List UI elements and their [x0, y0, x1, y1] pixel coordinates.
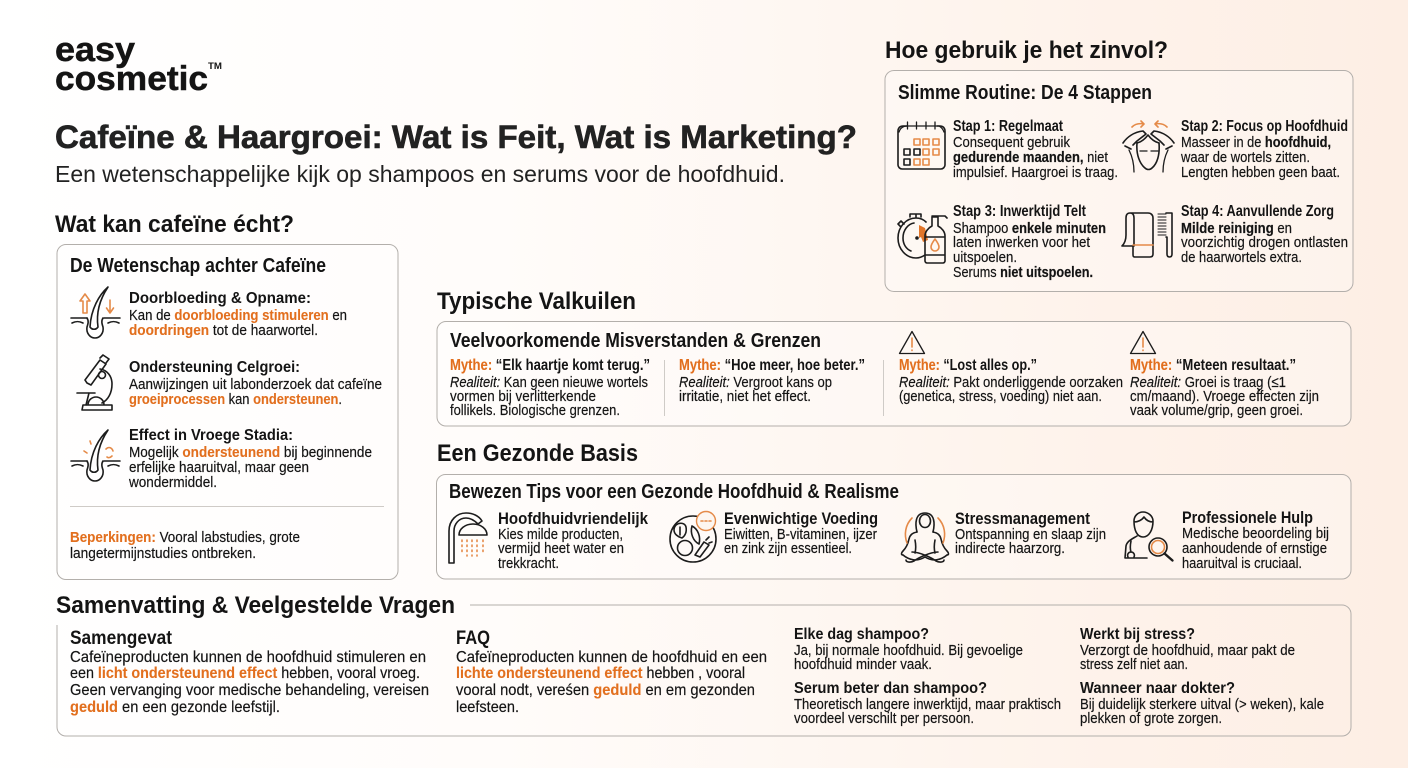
text: Effect in Vroege Stadia: Mogelijk ondersteunend bij beginnende: [129, 444, 372, 461]
text: Samengevat: Samengevat: [70, 628, 173, 649]
text: Doorbloeding & Opname: Kan de doorbloeding stimuleren en: [129, 307, 347, 324]
panel: Misverstanden & Grenzen: [437, 322, 1351, 426]
text: Effect in Vroege Stadia: [128, 427, 372, 491]
text: Stap 3: uitspoelen.: [953, 249, 1017, 266]
text: Beperkingen: Beperkingen: Vooral labstudies, grote: [70, 529, 300, 546]
myth 1: vormen bij verlitterkende: [450, 388, 596, 405]
text: Stap 3: Serums niet uitspoelen.: [953, 264, 1093, 281]
logo: easy cosmetic: TM: [208, 61, 222, 71]
text: Stap 4: Milde reiniging en: [1181, 220, 1292, 237]
text: Hoofdhuidvriendelijk: trekkracht.: [498, 555, 559, 572]
text: Stressmanagement: [955, 509, 1106, 557]
logo: easy cosmetic: cosmetic: [55, 60, 208, 98]
text: Stap 1: gedurende maanden, niet: [953, 149, 1109, 166]
FAQ: Serum beter dan shampoo: [794, 680, 1061, 727]
text: Effect in Vroege Stadia: erfelijke haaruitval, maar geen: [129, 459, 309, 476]
text: Hoofdhuidvriendelijk: [498, 509, 648, 572]
panel heading: Slimme Routine: De 4 Stappen: [898, 81, 1152, 104]
heading: Samenvatting & Veelgestelde Vragen: Samenvatting & Veelgestelde Vragen: [56, 592, 455, 619]
text: Beperkingen: [70, 529, 300, 562]
logo: easy cosmetic: easy: [55, 31, 135, 69]
text: Stressmanagement: Ontspanning en slaap zijn: [955, 526, 1106, 543]
panel heading: De Wetenschap achter Cafeïne: [70, 254, 326, 277]
text: Stap 2: Stap 2: Focus op Hoofdhuid: [1181, 118, 1348, 135]
text: Stap 2: Lengten hebben geen baat.: [1181, 164, 1340, 181]
text: Beperkingen: langetermijnstudies ontbreken.: [70, 545, 256, 562]
text: Professionele Hulp: Professionele Hulp: [1182, 508, 1313, 527]
text: Samengevat: een licht ondersteunend effect hebben, vooral vroeg.: [70, 665, 420, 682]
FAQ: Elke dag shampoo: [794, 626, 1023, 673]
myth 3: [899, 357, 1123, 405]
text: Hoofdhuidvriendelijk: Kies milde producten,: [498, 526, 623, 543]
text: Hoofdhuidvriendelijk: vermijd heet water en: [498, 540, 624, 557]
heading: Hoe gebruik je het zinvol?: Hoe gebruik je het zinvol?: [885, 37, 1168, 64]
panel heading: Bewezen Tips voor een Gezonde Hoofdhuid & Realisme: [449, 480, 899, 503]
text: Stap 2: Masseer in de hoofdhuid,: [1181, 134, 1331, 151]
text: Stap 2: [1180, 118, 1348, 181]
text: Stap 1: Consequent gebruik: [953, 134, 1070, 151]
FAQ: Serum beter dan shampoo: Theoretisch langere inwerktijd, maar praktisch: [794, 696, 1061, 713]
text: Stap 4: [1181, 203, 1348, 266]
text: Ondersteuning Celgroei: Ondersteuning Celgroei:: [129, 359, 300, 376]
text: Doorbloeding & Opname: [129, 290, 347, 339]
icon: warning triangle: [1130, 332, 1156, 354]
icon: calendar: [898, 122, 945, 169]
text: FAQ summary: FAQ: [456, 628, 490, 649]
FAQ: Werkt bij stress: Verzorgt de hoofdhuid, maar pakt de: [1080, 642, 1295, 659]
icon: shower: [449, 513, 487, 563]
text: Ondersteuning Celgroei: Aanwijzingen uit labonderzoek dat cafeïne: [129, 376, 382, 393]
FAQ: Wanneer naar dokter: Wanneer naar dokter?: [1080, 680, 1235, 697]
text: FAQ summary: leefsteen.: [456, 699, 519, 716]
panel: Samenvatting & FAQ: [57, 605, 1351, 736]
FAQ: Werkt bij stress: Werkt bij stress?: [1080, 626, 1195, 643]
text: Effect in Vroege Stadia: wondermiddel.: [128, 474, 217, 491]
myth 2: Mythe: “Hoe meer, hoe beter.”: [679, 357, 865, 374]
icon: head massage: [1123, 121, 1174, 172]
text: Stap 1: Stap 1: Regelmaat: [953, 118, 1063, 135]
text: Hoofdhuidvriendelijk: Hoofdhuidvriendelijk: [498, 509, 648, 528]
text: Stressmanagement: Stressmanagement: [955, 509, 1090, 528]
panel: De Wetenschap achter Cafeïne: [57, 244, 398, 580]
text: FAQ summary: vooral nodt, vereśen geduld en em gezonden: [456, 682, 755, 699]
logo: easy cosmetic: [55, 31, 222, 98]
FAQ: Wanneer naar dokter: plekken of grote zorgen.: [1080, 710, 1222, 727]
text: Stressmanagement: indirecte haarzorg.: [955, 540, 1065, 557]
text: Samengevat: geduld en een gezonde leefstijl.: [70, 699, 280, 716]
panel: Bewezen Tips: [436, 474, 1351, 579]
FAQ: Elke dag shampoo: Elke dag shampoo?: [794, 626, 929, 643]
icon: hair follicle early stage: [71, 430, 120, 481]
heading: Typische Valkuilen: Typische Valkuilen: [437, 288, 636, 315]
text: Professionele Hulp: haaruitval is cruciaal.: [1182, 555, 1302, 572]
icon: microscope: [77, 355, 112, 410]
text: Evenwichtige Voeding: Evenwichtige Voeding: [724, 509, 878, 528]
icon: hair follicle with arrows: [71, 287, 120, 338]
text: Samengevat: Geen vervanging voor medische behandeling, vereisen: [70, 682, 429, 699]
text: Samengevat: Cafeïneproducten kunnen de hoofdhuid stimuleren en: [70, 649, 426, 666]
myth 3: Realiteit: Pakt onderliggende oorzaken: [899, 374, 1123, 391]
text: Stap 1: [953, 118, 1118, 181]
icon: warning triangle: [900, 332, 924, 354]
text: Professionele Hulp: [1182, 508, 1329, 572]
myth 4: Realiteit: Groei is traag (≤1: [1130, 374, 1286, 391]
text: Stap 3: Stap 3: Inwerktijd Telt: [953, 203, 1086, 220]
text: Doorbloeding & Opname: Doorbloeding & Opname:: [129, 290, 311, 307]
text: Stap 3: [953, 203, 1106, 281]
text: Evenwichtige Voeding: en zink zijn essentieel.: [724, 540, 852, 557]
text: Stap 4: de haarwortels extra.: [1181, 249, 1302, 266]
text: Stap 3: laten inwerken voor het: [953, 234, 1091, 251]
text: Effect in Vroege Stadia: Effect in Vroege Stadia:: [129, 427, 293, 444]
title: Cafeïne & Haargroei: Wat is Feit, Wat is Marketing?: [55, 119, 857, 155]
icon: towel and comb: [1122, 213, 1172, 257]
text: Evenwichtige Voeding: Eiwitten, B-vitaminen, ijzer: [724, 526, 877, 543]
subtitle: Een wetenschappelijke kijk op shampoos en serums voor de hoofdhuid.: [55, 161, 785, 187]
myth 1: [450, 357, 650, 419]
icon: food plate: [670, 512, 716, 562]
myth 1: Mythe: “Elk haartje komt terug.”: [450, 357, 650, 374]
myth 4: [1130, 357, 1319, 419]
text: Stap 4: Stap 4: Aanvullende Zorg: [1181, 203, 1334, 220]
icon: meditation: [902, 513, 948, 562]
text: Stap 1: impulsief. Haargroei is traag.: [953, 164, 1118, 181]
myth 2: irritatie, niet het effect.: [679, 388, 811, 405]
icon: doctor with magnifier: [1125, 512, 1172, 560]
text: Stap 2: waar de wortels zitten.: [1180, 149, 1310, 166]
myth 2: Realiteit: Vergroot kans op: [679, 374, 832, 391]
panel: Slimme Routine: [885, 70, 1353, 292]
text: Ondersteuning Celgroei: [129, 359, 382, 408]
FAQ: Werkt bij stress: stress zelf niet aan.: [1080, 656, 1188, 673]
FAQ: Wanneer naar dokter: Bij duidelijk sterkere uitval (> weken), kale: [1080, 696, 1324, 713]
myth 3: (genetica, stress, voeding) niet aan.: [899, 388, 1102, 405]
panel heading: Veelvoorkomende Misverstanden & Grenzen: [450, 329, 821, 352]
myth 4: cm/maand). Vroege effecten zijn: [1130, 388, 1319, 405]
FAQ: Serum beter dan shampoo: Serum beter dan shampoo?: [794, 680, 987, 697]
FAQ: Werkt bij stress: [1080, 626, 1295, 673]
FAQ: Elke dag shampoo: hoofdhuid minder vaak.: [794, 656, 932, 673]
text: Evenwichtige Voeding: [724, 509, 878, 557]
text: Ondersteuning Celgroei: groeiprocessen kan ondersteunen.: [129, 391, 342, 408]
myth 4: vaak volume/grip, geen groei.: [1130, 402, 1303, 419]
heading: Wat kan cafeïne écht?: Wat kan cafeïne écht?: [55, 211, 294, 238]
text: Doorbloeding & Opname: doordringen tot de haarwortel.: [129, 322, 318, 339]
text: Professionele Hulp: aanhoudende of ernstige: [1182, 540, 1327, 557]
FAQ: Wanneer naar dokter: [1080, 680, 1324, 727]
text: Stap 4: voorzichtig drogen ontlasten: [1181, 234, 1348, 251]
myth 2: [679, 357, 865, 405]
text: FAQ summary: [456, 628, 767, 716]
text: FAQ summary: Cafeïneproducten kunnen de hoofdhuid en een: [456, 649, 767, 666]
text: Stap 3: Shampoo enkele minuten: [953, 220, 1106, 237]
FAQ: Elke dag shampoo: Ja, bij normale hoofdhuid. Bij gevoelige: [794, 642, 1023, 659]
FAQ: Serum beter dan shampoo: voordeel verschilt per persoon.: [794, 710, 974, 727]
heading: Een Gezonde Basis: Een Gezonde Basis: [437, 440, 638, 467]
myth 1: Realiteit: Kan geen nieuwe wortels: [450, 374, 648, 391]
myth 3: Mythe: “Lost alles op.”: [899, 357, 1037, 374]
text: FAQ summary: lichte ondersteunend effect hebben , vooral: [456, 665, 745, 682]
myth 1: follikels. Biologische grenzen.: [450, 402, 620, 419]
text: Samengevat: [70, 628, 429, 716]
myth 4: Mythe: “Meteen resultaat.”: [1130, 357, 1296, 374]
icon: stopwatch and bottle: [898, 214, 947, 263]
text: Professionele Hulp: Medische beoordeling bij: [1182, 525, 1329, 542]
